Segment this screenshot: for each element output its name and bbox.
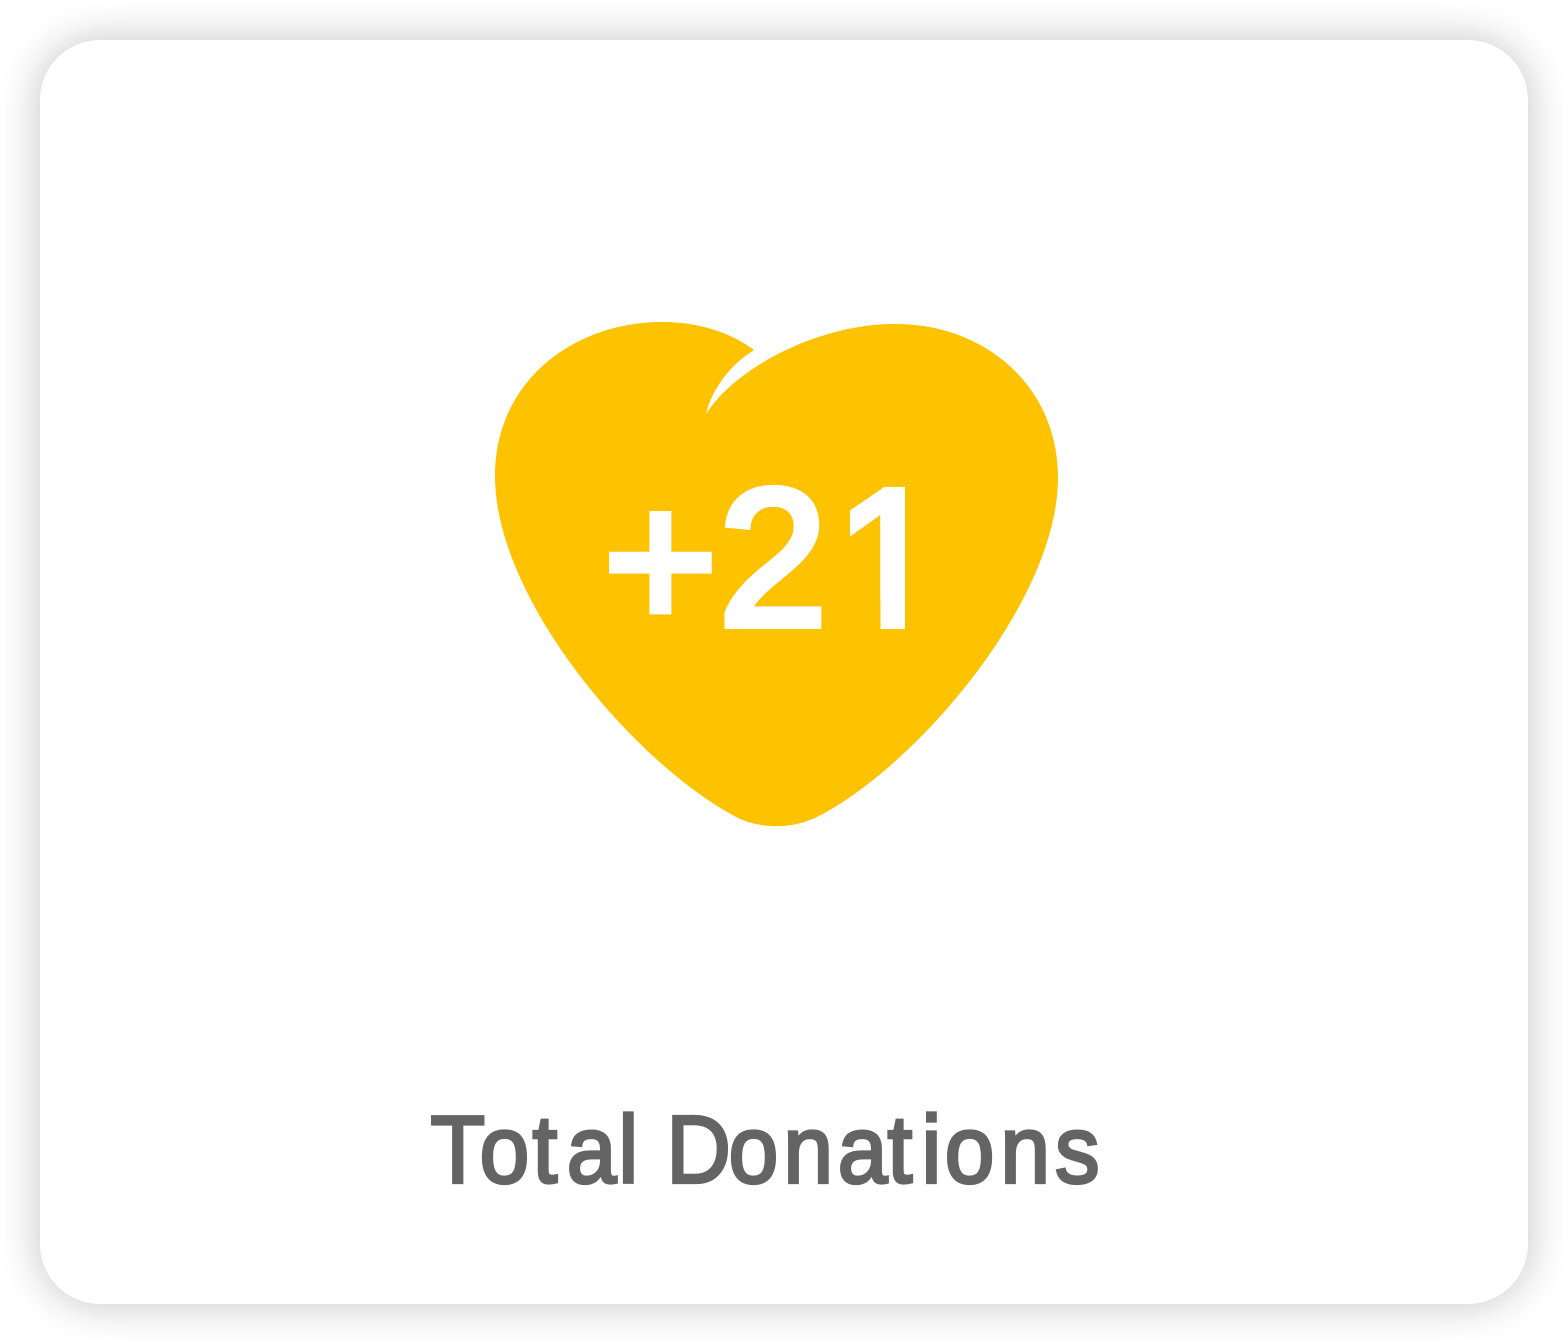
icon: yellow heart: [495, 322, 1058, 826]
label: Total Donations: Total Donations: [430, 1096, 1100, 1203]
value: +21: +21: [604, 449, 944, 670]
